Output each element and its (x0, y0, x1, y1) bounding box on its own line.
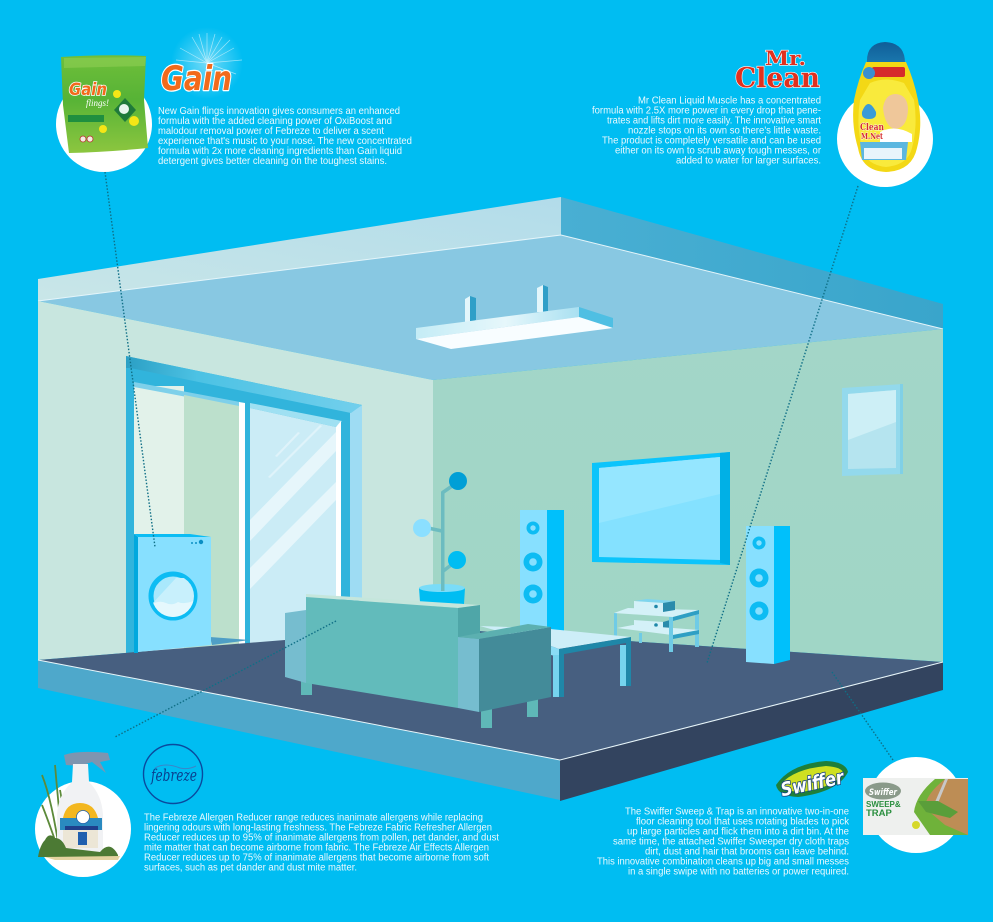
leader line: Febreze to sofa (115, 621, 336, 737)
right wall (433, 329, 943, 662)
text: Mr Clean description: either on its own to scrub away tough messes, or (615, 146, 822, 156)
text: Swiffer description: dirt, dust and hair that brooms can leave behind. (645, 846, 849, 858)
text: Mr Clean description: nozzle stops on its own so there's little waste. (628, 126, 821, 136)
product: Febreze spray (35, 752, 131, 877)
window (126, 356, 362, 660)
text: Swiffer description: up large particles and flick them into a dirt bin. At the (627, 826, 850, 838)
text: Swiffer description: in a single swipe with no batteries or power required. (628, 866, 849, 878)
text: Febreze description: surfaces, such as pet dander and dust mite matter. (144, 862, 357, 874)
text: Mr Clean description (592, 96, 822, 166)
sofa (285, 594, 551, 728)
panel: Mr Clean (592, 42, 933, 187)
logo: Gain (161, 27, 243, 99)
text: Mr Clean description: formula with 2.5X more power in every drop that pene- (592, 106, 821, 116)
text: Gain description: malodour removal power of Febreze to deliver a scent (158, 126, 384, 137)
text: Mr Clean description: The product is completely versatile and can be used (602, 136, 821, 146)
text: Mr Clean description: trates and lifts dirt more easily. The innovative smart (607, 116, 821, 126)
text: Gain description: detergent gives better cleaning on the toughest stains. (158, 156, 387, 167)
logo: Gain: Gain (161, 59, 232, 99)
logo: Mr Clean: Mr. (765, 46, 806, 70)
text: Febreze description: lingering odours with long-lasting freshness. The Febreze Fabric Refresher Allergen (144, 822, 492, 834)
left wall (38, 301, 433, 660)
ceiling (38, 197, 943, 380)
coffee table (480, 626, 631, 697)
room (38, 197, 943, 801)
text: Febreze description: The Febreze Allergen Reducer range reduces inanimate allergens while replacing (144, 812, 483, 824)
wall picture (842, 384, 903, 476)
speaker left (520, 510, 564, 632)
logo: Febreze: febreze (150, 766, 197, 786)
text: Febreze description (144, 812, 499, 874)
product: Gain flings pack (56, 55, 152, 172)
text: Swiffer description: The Swiffer Sweep & Trap is an innovative two-in-one (625, 806, 850, 818)
text: Febreze description: mite matter that can become airborne from fabric. The Febreze Air Effects Allergen (144, 842, 489, 854)
panel: Gain (56, 27, 412, 172)
product: Swiffer Sweep and Trap box: SWEEP& (866, 800, 901, 809)
text: Swiffer description: floor cleaning tool that uses rotating blades to pick (636, 816, 849, 828)
text: Mr Clean description: Mr Clean Liquid Muscle has a concentrated (638, 96, 821, 106)
logo: Swiffer: Swiffer (779, 766, 847, 801)
text: Febreze description: Reducer reduces up to 95% of inanimate allergens from pollen, pet dander, and dust (144, 832, 499, 844)
leader line: Mr Clean to floor (707, 186, 858, 663)
text: Swiffer description: same time, the attached Swiffer Sweeper dry cloth traps (613, 836, 849, 848)
speaker right (746, 526, 790, 664)
plant (413, 472, 467, 604)
television (592, 452, 730, 565)
floor (38, 628, 943, 801)
product: Mr Clean bottle: M.Net (861, 132, 883, 142)
text: Swiffer description (597, 806, 850, 878)
logo: Febreze (144, 744, 202, 804)
text: Gain description: formula with 2x more cleaning ingredients than Gain liquid (158, 146, 402, 157)
text: Gain description (158, 106, 412, 167)
washing machine (134, 534, 211, 653)
product: Gain flings pack: Gain (69, 80, 107, 100)
product: Swiffer Sweep and Trap box: Swiffer (869, 788, 897, 798)
text: Mr Clean description: added to water for larger surfaces. (676, 156, 821, 166)
text: Gain description: experience that's music to your nose. The new concentrated (158, 136, 412, 147)
product: Swiffer Sweep and Trap box (863, 757, 968, 853)
panel: Febreze (35, 744, 499, 877)
text: Febreze description: Reducer reduces up to 75% of inanimate allergens that become airborne from soft (144, 852, 489, 864)
text: Swiffer description: This innovative combination cleans up big and small messes (597, 856, 849, 868)
ceiling light (416, 285, 613, 349)
product: Mr Clean bottle (837, 42, 933, 187)
product: Swiffer Sweep and Trap box: TRAP (866, 808, 893, 819)
logo: Mr Clean (735, 46, 820, 94)
product: Mr Clean bottle: Clean (860, 123, 884, 133)
logo: Mr Clean: Clean (735, 63, 820, 94)
text: Gain description: formula with the added cleaning power of OxiBoost and (158, 116, 392, 127)
leader line: Swiffer to floor (832, 672, 893, 760)
stereo shelf (614, 599, 699, 652)
leader line: Gain to washer (105, 172, 155, 547)
panel: Swiffer (597, 757, 968, 878)
text: Gain description: New Gain flings innovation gives consumers an enhanced (158, 106, 400, 117)
product: Gain flings pack: flings! (86, 98, 109, 108)
